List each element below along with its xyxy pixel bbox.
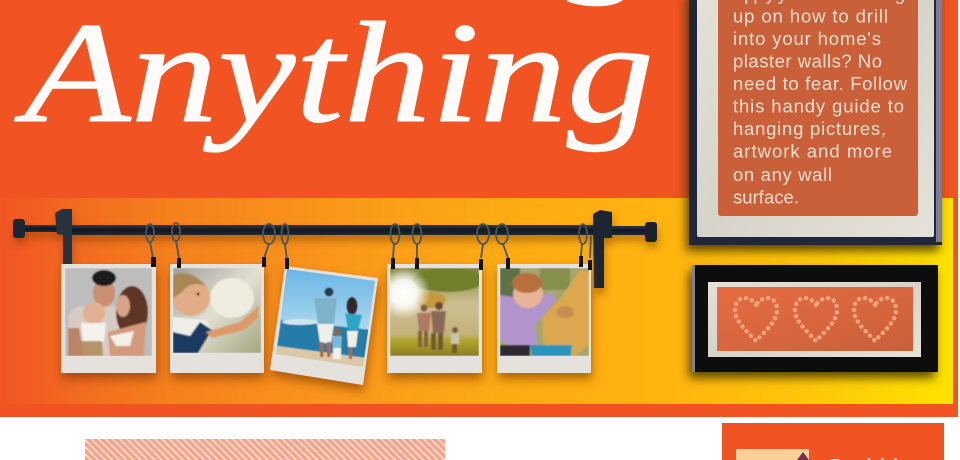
icon: purple tool tip <box>797 452 809 460</box>
icon: hearts <box>735 298 896 341</box>
intro text <box>733 0 908 207</box>
intro text panel <box>718 0 918 216</box>
small frame with hearts <box>692 265 938 372</box>
photo 5: baby and dog <box>497 264 591 373</box>
photo 1: family portrait <box>61 264 156 373</box>
intro text: need to fear. Follow <box>733 73 908 94</box>
intro text: into your home's <box>733 28 881 49</box>
intro text: surface. <box>733 186 799 207</box>
intro text: artwork and more <box>733 141 892 162</box>
photo 3: family on the beach <box>270 262 380 385</box>
hatched section banner <box>85 439 445 460</box>
intro text: hanging pictures, <box>733 118 886 139</box>
supplies icon swatch <box>736 449 809 460</box>
large frame with intro text <box>689 0 942 245</box>
photo 4: family walking in sunlight <box>378 264 484 373</box>
supplies panel <box>722 423 944 460</box>
rings and clips <box>146 223 592 270</box>
intro text: up on how to drill <box>733 6 888 27</box>
intro text: plaster walls? No <box>733 51 882 72</box>
intro text: this handy guide to <box>733 96 904 117</box>
curtain rod <box>13 209 657 288</box>
intro text: on any wall <box>733 164 832 185</box>
photo 2: toddler pointing <box>170 264 264 373</box>
gradient wall panel <box>0 198 953 404</box>
